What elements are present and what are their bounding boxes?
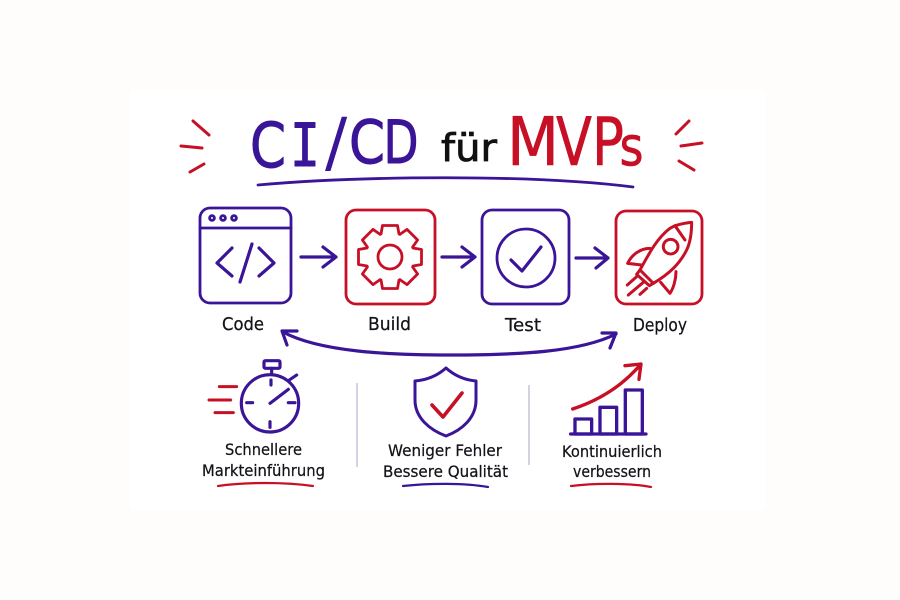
label: Deploy: Deploy — [633, 315, 687, 336]
benefit: continuous improvement — [562, 364, 662, 487]
label: Test: Test — [504, 315, 541, 336]
title: M — [507, 103, 559, 181]
arrow: Build to Test — [442, 247, 475, 267]
step: Code — [200, 208, 291, 335]
title: s — [620, 115, 644, 178]
icon: check circle — [482, 210, 569, 304]
right accent sparks — [676, 121, 702, 170]
label: Code: Code — [222, 314, 264, 335]
text: Schnellere Markteinführung — [202, 440, 325, 480]
icon: growth bar chart — [571, 364, 646, 434]
icon: shield with check — [415, 368, 476, 436]
title: P — [592, 103, 624, 181]
blue underline — [403, 484, 488, 487]
step: Test — [482, 210, 569, 336]
red underline — [218, 483, 313, 486]
text: Weniger Fehler Bessere Qualität: Bessere Qualität — [383, 462, 508, 481]
text: Schnellere Markteinführung: Markteinführung — [202, 461, 325, 480]
icon: stopwatch — [209, 361, 299, 432]
red underline — [571, 484, 651, 487]
step: Deploy — [616, 211, 702, 336]
icon: rocket — [616, 211, 702, 304]
arrow: Test to Deploy — [576, 248, 608, 268]
text: Weniger Fehler Bessere Qualität: Weniger Fehler — [388, 441, 502, 460]
text: Kontinuierlich verbessern — [562, 442, 662, 481]
title: D — [384, 108, 418, 178]
title underline — [258, 178, 633, 187]
left accent sparks — [181, 121, 209, 172]
title: C — [250, 109, 286, 182]
text: Weniger Fehler Bessere Qualität — [383, 441, 508, 481]
text: Kontinuierlich verbessern: verbessern — [573, 462, 651, 481]
text: Schnellere Markteinführung: Schnellere — [225, 440, 302, 459]
title — [250, 103, 644, 182]
text: Kontinuierlich verbessern: Kontinuierlich — [562, 442, 662, 461]
title: für — [441, 126, 497, 170]
arrow: Code to Build — [301, 247, 336, 267]
title: V — [556, 103, 592, 181]
icon: code window — [200, 208, 291, 303]
title: C — [349, 108, 385, 178]
benefit: fewer errors — [383, 368, 508, 487]
feedback loop double arrow — [282, 331, 616, 355]
icon: gear — [346, 210, 435, 304]
title: I — [290, 111, 320, 181]
title: / — [325, 104, 348, 181]
label: Build: Build — [368, 314, 411, 335]
step: Build — [346, 210, 435, 335]
benefit: faster time to market — [202, 361, 325, 486]
